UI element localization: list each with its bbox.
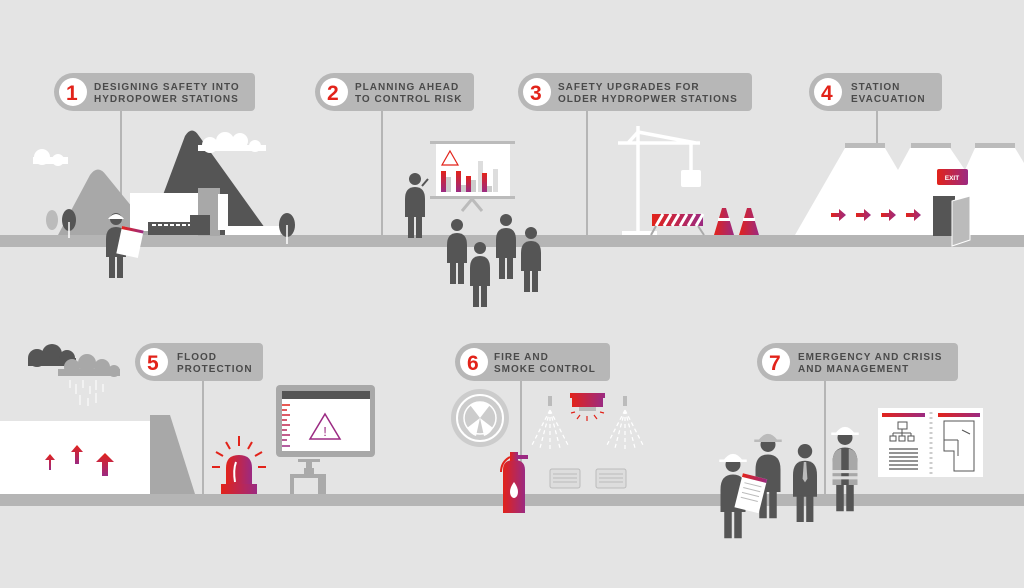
callout 5: FLOOD — [177, 352, 217, 363]
scene 4: evacuation tunnel — [795, 143, 1024, 246]
scene 3: construction — [618, 126, 759, 235]
callout 3 — [518, 73, 752, 236]
callout 4: STATION — [851, 82, 900, 93]
callout 5 — [135, 343, 263, 495]
ground band top — [0, 235, 1024, 247]
person 1 clipboard — [719, 454, 767, 538]
callout 3: OLDER HYDROPWER STATIONS — [558, 94, 738, 105]
callout 4: EVACUATION — [851, 94, 926, 105]
callout 7: 7 — [769, 352, 781, 375]
callout 6: SMOKE CONTROL — [494, 364, 596, 375]
callout 1: HYDROPOWER STATIONS — [94, 94, 239, 105]
ground band bottom — [0, 494, 1024, 506]
person 2 grey hat — [754, 434, 782, 518]
callout 7: EMERGENCY AND CRISIS — [798, 352, 942, 363]
callout 3: SAFETY UPGRADES FOR — [558, 82, 700, 93]
callout 1: DESIGNING SAFETY INTO — [94, 82, 240, 93]
callout 1 — [54, 73, 255, 236]
scene 5: flood — [0, 344, 375, 494]
scene 5: flood: ! — [323, 424, 327, 439]
scene 6: fire — [451, 389, 643, 513]
callout 2 — [315, 73, 474, 236]
callout 6: 6 — [467, 352, 479, 375]
callout 4 — [809, 73, 942, 145]
callout 4: 4 — [821, 82, 833, 105]
scene 1: hydropower station — [33, 130, 295, 278]
callout 2: PLANNING AHEAD — [355, 82, 459, 93]
callout 2: TO CONTROL RISK — [355, 94, 462, 105]
callout 6 — [455, 343, 610, 495]
callout 5: PROTECTION — [177, 364, 253, 375]
callout 7 — [757, 343, 958, 495]
callout 5: 5 — [147, 352, 159, 375]
callout 6: FIRE AND — [494, 352, 549, 363]
person 4 vest — [831, 427, 859, 511]
callout 7: AND MANAGEMENT — [798, 364, 909, 375]
person 3 tie — [793, 444, 817, 522]
callout 2: 2 — [327, 82, 339, 105]
scene 4: evacuation tunnel: EXIT — [945, 175, 959, 182]
callout 1: 1 — [66, 82, 78, 105]
callout 3: 3 — [530, 82, 542, 105]
scene 2: presentation — [405, 141, 541, 307]
scene 7: emergency team — [719, 408, 983, 538]
